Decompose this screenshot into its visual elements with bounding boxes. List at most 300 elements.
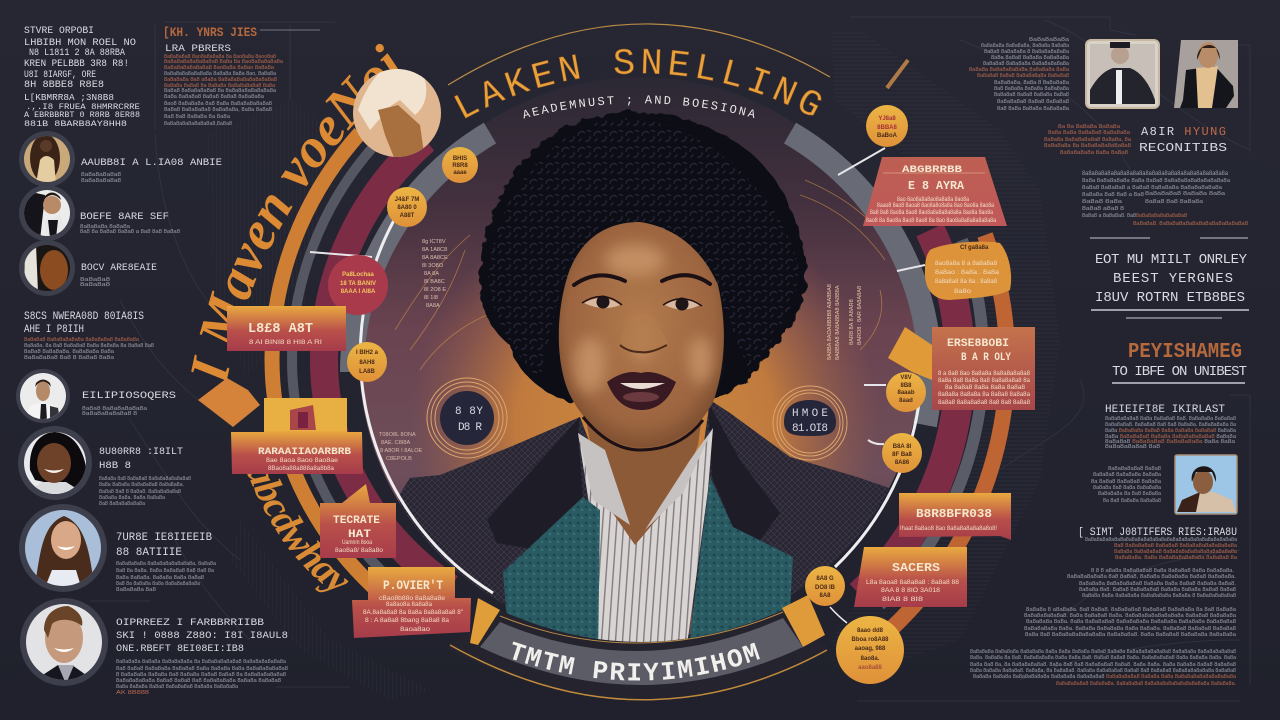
subtitle: AEADEMNUST ; AND BOESIONA — [524, 95, 754, 118]
right orange heading: PEYISHAMEG — [1128, 341, 1242, 364]
right lower text: 8a8a8a8a 8a8a8a8a8a8 8a8a8a 8a8a 8a8a8 8a8a8a 8a8a8. — [1079, 581, 1236, 587]
profile 2 — [19, 185, 180, 241]
box: trapezoid: ABGBRRBB — [902, 165, 962, 176]
ring: right orange arc — [890, 235, 1007, 630]
callout: gold circle 3: LA8B — [359, 369, 375, 375]
profile 1 — [19, 130, 222, 187]
right lower text — [970, 527, 1238, 687]
profile 1: AAUBB8I A L.IA08 ANBIE — [81, 158, 222, 169]
profile 2: 8a8 8a 8a8a8 8a8a8 a 8a8 8a8 8a8a8 — [80, 229, 180, 235]
box: trapezoid: E 8 AYRA — [908, 179, 965, 193]
vertical notes inside disc right: 8A8B8A8 8A8A8BA8 8A8B8A — [835, 285, 841, 360]
right section with photo: 8a8a 8a8a8a8a 8a8a8 8a8a 8a8a8a 8a8a8a8 8a8a8a — [1105, 428, 1237, 434]
right lower text: 8a8a8a 8a8a8a8a8 8a8a8a8a8a8a8a8a8a8a8a8a — [1114, 549, 1238, 555]
right heading: A8IR HYUNG — [1141, 125, 1226, 139]
callout: gold circle 2: A88T — [400, 213, 415, 219]
right paragraph: 8a8a8 a 8a8a8a8. 8a88a8a8a8a8a8a8a8a8 — [1082, 213, 1187, 219]
vertical notes inside disc right: 8ARO8 : 8AR 8A8A8A8 — [857, 286, 863, 345]
box: salmon detail: 8a 8a8a8 8a8a 8a8a 8a8a8 — [945, 385, 1026, 391]
title: LAKEN SNELLING — [454, 48, 822, 118]
short notes inside disc left upper: 8A8A — [426, 303, 440, 309]
vertical notes inside disc right — [827, 284, 863, 360]
left column: top article: 8a8a8a8a8a8a8a8a 8a8a8a 8a8a 8ao, 8a8a8a — [164, 71, 277, 77]
badge: left concentric rings: D8 R — [458, 422, 482, 434]
profile 5 — [18, 426, 191, 507]
left column: intro text: 8H 8BBE8 R8E8 — [24, 80, 104, 91]
section text: 8a8a8 8a8a8a8a. 8a8a8a8a 8a8a — [24, 349, 115, 355]
right paragraph: 8a8a8 8a8a8a8 a 8a8a8 8a8a8a8a 8a8a8a8a8a8a — [1082, 185, 1223, 191]
profile 7 — [20, 598, 288, 696]
callout: gold circle bottom right: DO8 IB — [815, 585, 836, 591]
callout: crimson circle: 8AAA I AI8A — [341, 289, 376, 295]
script lettering lower left: abcdwhay — [247, 474, 348, 592]
box: sacers: 8AA 8 8 8IO 3A018 — [881, 588, 941, 594]
short notes inside disc left upper: 8I 1I8 — [424, 295, 438, 301]
right lower text: 8a8 8a8a8a8a8 8a8a8a8 8a8a8a8a8a8a8a8a8a — [1114, 543, 1238, 549]
callout: gold circle 2: 8A80 0 — [397, 205, 417, 211]
teal scarf — [503, 477, 793, 660]
callout: crimson circle — [328, 255, 388, 315]
callout: gold circle 1 — [442, 147, 478, 183]
box: sacers: L8a 8aoa8 8a8a8a8 : 8a8a8 88 — [866, 580, 960, 586]
box: orange blob: 8a8a8a8 8a 8a : 8a8a8 — [935, 279, 998, 285]
box: tecrate hat — [320, 484, 396, 558]
right section with photo: 8a8a8a8a 8a 8a8 8a8a8a — [1098, 491, 1162, 497]
left column: top article: 8a8a8a 8a8a8 8a 8a8a8a 8a8a8a8a8a8 8a8a — [164, 83, 276, 89]
profile 4: 8a8a8a8a8a8a8 8 — [82, 411, 137, 417]
box: trapezoid — [863, 157, 1007, 226]
right paragraph: 8a8a8a8. 8a8a8a8a8a8a8a8a8a8a8a8a8a8 — [1133, 221, 1248, 227]
callout: large gold circle: aaoag, 988 — [855, 646, 886, 652]
box: salmon detail: ERSE8BOBI — [947, 338, 1009, 350]
callout: gold circle 2 — [387, 187, 427, 227]
profile 6: 7UR8E IE8IIEEIB — [116, 532, 212, 544]
accent dash — [887, 60, 908, 88]
box: orange blob: 8a8ao : 8a8a . 8a8a — [935, 270, 1000, 276]
connectors — [310, 148, 925, 444]
callout: gold circle 1: BHIS — [453, 156, 467, 162]
short notes inside disc left upper: 8I BA8C — [424, 279, 445, 285]
right top text: 8a8a8a8a8 8a8a8 8a8a8a8 — [997, 99, 1069, 105]
left column: intro text: N8 L1811 2 8A 88RBA — [29, 48, 125, 59]
right heading: RECONITIBS — [1139, 141, 1227, 155]
profile 3: 8a8a8a8 — [80, 277, 110, 283]
right lower text: 8a8a8a8a8a8a8. 8a8a 8a8a8a8 8a8a. 8a8a8a8a8a8a8a8a8a 8a8a8a8 8a8a8a8a — [1024, 613, 1237, 619]
notes inside disc left lower: 8AE. C8I8A — [381, 440, 410, 446]
profile 6: 8a8a8a8a 8a8 — [116, 587, 156, 593]
profile 3 — [19, 240, 157, 296]
profile 6: 88 8ATIIIE — [116, 547, 182, 559]
ring: left grey arc — [292, 147, 400, 588]
callout: gold circle bottom right: 8A8 — [819, 593, 831, 599]
callout: gold circle bottom right: 8A8 G — [816, 576, 834, 582]
box: trapezoid: 8a8 8a8 8ao8a 8ao8 8ao8a8a8a8a8a8a 8ao8a 8ao8a — [870, 210, 994, 216]
gold diamond right — [888, 327, 932, 380]
right top text: 8a8a8a8 8a8a8 8a8a8a8a8a 8a8a8a8 — [977, 73, 1069, 79]
left column: intro text: L[KBMRR8A ;3N8B8 — [24, 93, 114, 103]
box: trapezoid: 8aao8 8ao8 8aoa8 8ao8a8o8a8a 8ao 8ao8a 8ao8a — [877, 203, 995, 209]
right top text: 8a8a8a8a 8a8a8a8a, 8a8a8a 8a8a8a — [981, 43, 1070, 49]
profile 7: 8a8 8a8a8 8a8a8a8a 8a8a8a8 8a8a 8a8a8a 8a8a 8a8a8a8a8a8a8 — [116, 666, 288, 672]
left column: top article: 8a8 8a8 8a8a8a 8a 8a8a — [164, 114, 231, 120]
right orange note: 8a8a8a8a 8a 8a8a8a8a8a8a8a8 — [1044, 143, 1131, 149]
box: salmon detail: B A R OLY — [961, 352, 1011, 364]
box: right ribbon: B8R8BFR038 — [916, 507, 992, 521]
banner text: TMTM PRIYIMIHOM — [512, 642, 760, 680]
left column: intro text: STVRE ORPOBI — [24, 26, 94, 37]
box: ribbon with icon: 8Bao8a88a888a8a8b8a — [268, 466, 335, 472]
right paragraph: 8a8a8a8a8 8a8a8a 8a8a — [1145, 191, 1226, 197]
script lettering upper left: I Maven voeNoi — [191, 44, 398, 380]
box: tecrate hat: 8ao8a8/ 8a8a8o — [335, 548, 384, 554]
hair — [480, 111, 806, 402]
box: sacers: SACERS — [892, 561, 940, 575]
right heading — [1139, 125, 1227, 155]
right paragraph: 8a8a8a8a8a8a8a8a8a8a8a8a8a8a8a8a8a8a8a8a8a8a8a — [1082, 170, 1228, 177]
profile 2: 8a8a8a8a 8a8a8a — [80, 224, 131, 230]
short notes inside disc left upper: 8A 1A8C8 — [422, 247, 447, 253]
right subheading: TO IBFE ON UNIBEST — [1112, 364, 1247, 380]
box: tecrate hat: HAT — [348, 529, 371, 541]
left column: top article: 8a8a8a8a 8a8 a8a8a 8a8a8a8a8a8a8a8a8a8 — [164, 77, 277, 83]
callout: gold circle right top: 8BBA8 — [877, 125, 897, 131]
right section with photo: 8a 8a8a8 8a8a8a8 8a8a8a — [1091, 479, 1162, 485]
rules — [1090, 238, 1249, 383]
profile 5: 8a8a8a 8a8 8a8a8a8 8a8a8a8a8a8a8a8 — [99, 476, 191, 482]
right orange note: 8a 8a 8a8a8a 8a8a8a — [1058, 124, 1121, 130]
right paragraph: 8a8a8 a8a8 8 — [1082, 206, 1124, 212]
right lower text: 8 8 8 a8a8a 8a8a8a8a8 8a8a 8a8a8a8 8a8a 8a8a8a8a. — [1091, 568, 1234, 574]
right section with photo: 8a 8a8 8a8a8a 8a8a8a8 — [1103, 498, 1161, 504]
badge: left concentric rings — [427, 378, 507, 458]
right top text: 8a8a8 8a8a8a8a 8 8a8a8a8a8a8a — [984, 49, 1070, 55]
right lower text: 8a8a8a 8 a8a8a8a. 8a8 8a8a8. 8a8a8a8a8 8a8a8a8 8a8a8a8a 8a 8a8 8a8a8a — [1026, 607, 1237, 613]
central disc — [359, 77, 921, 639]
right paragraph — [1082, 170, 1248, 227]
left column: intro text: A EBRBBRBT 0 R8RB 8ER88 — [24, 111, 140, 120]
orange diamond left — [198, 378, 260, 427]
right lower text: [ SIMT J08TIFERS RIES:IRA8U — [1078, 527, 1237, 539]
callout: gold circle right 2 — [886, 372, 926, 412]
badge: right concentric rings: H M O E — [792, 408, 828, 420]
box: sacers — [854, 547, 967, 607]
box: tecrate hat: TECRATE — [333, 515, 380, 527]
callout: gold circle right 2: 8B8 — [900, 383, 912, 389]
right section with photo: HEIEIFI8E IKIRLAST — [1105, 404, 1225, 416]
short notes inside disc left upper: 8A 8A — [424, 271, 439, 277]
profile 2: BOEFE 8ARE SEF — [80, 212, 169, 223]
left column: intro text — [24, 26, 140, 129]
right top text: 8a8a8a8 8a8a8 8a8a8a 8a8a8 — [994, 92, 1069, 98]
box: orange blob: 8ao8a8a 8 a 8a8a8a8 — [935, 261, 998, 267]
shirt collar — [578, 428, 713, 530]
profile 5: 8a8a8 8a8 8 8a8a8. 8a8a8a8a8a8 — [99, 489, 181, 495]
section text — [24, 311, 154, 361]
box: povier: 8a8ao8a 8a8a8a — [386, 602, 433, 608]
concentric rings — [272, 133, 1007, 630]
right large statement: EOT MU MIILT ONRLEY — [1095, 252, 1248, 268]
right paragraph: 8a8a8 8a8 8a8a8a — [1145, 199, 1204, 205]
profile 3: 8a8a8a8 — [80, 282, 110, 288]
badge: right concentric rings: 81.OI8 — [792, 423, 828, 435]
callout: large gold circle: aao8a88 — [858, 665, 883, 671]
grey arc segments — [352, 133, 930, 425]
right paragraph: 8a8a8 8a8a — [1082, 199, 1123, 205]
badge: right concentric rings — [773, 386, 847, 460]
profile 3: BOCV ARE8EAIE — [81, 263, 157, 274]
box: povier: 8 : A 8a8a8 8bang 8a8a8 8a — [365, 618, 450, 624]
right section with photo: 8a8a8a8a8a8 8a8a 8a8a8a8 8a8. 8a8a8a8a 8a8a8a8 — [1105, 416, 1236, 422]
left column: intro text: U8I 8IARGF, ORE — [24, 70, 96, 81]
right top text: 8a8a8a8a8a — [1029, 37, 1070, 43]
right paragraph: 8a8a8a 8a8 8a8 a 8a8 — [1082, 192, 1144, 198]
right section with photo: 8a8a8a8a8a8 8a8 — [1105, 444, 1160, 450]
box: right ribbon — [899, 493, 1011, 540]
profile 4 — [16, 369, 176, 423]
box: salmon detail: 8a8a8a 8a8a8a 8a 8a8a8 8a8a8a — [938, 392, 1031, 398]
right section with photo: 8a8a8a8a8a8 8a8a8 — [1108, 466, 1161, 472]
profile 7: SKI ! 0888 Z88O: I8I I8AUL8 — [116, 631, 288, 642]
short notes inside disc left upper: 8g ICT8V — [422, 239, 446, 245]
thin gold arc top — [448, 24, 830, 85]
profile 5: 8U80RR8 :I8ILT — [99, 447, 183, 458]
box: povier: P.OVIER'T — [383, 578, 443, 593]
right top text: 8a8a8a8 8a8a8a8a 8a8a8a8a8a8a — [983, 61, 1070, 67]
callout: gold circle 3 — [347, 342, 387, 382]
left column: top article: 8a8a8 8a8a8a8a8 8a8a8a8a, 8a8a 8a8a8 — [164, 107, 272, 113]
right lower text: 8a8a8a8a8a8 8a8a8a8a. 8a8a8a8a8 8a8a8a8a8a8a8a8a8a8a8a 8a8a8a8a. — [1056, 681, 1236, 687]
right top text: 8a8a8a8a, 8a8a 8 8a8a8a8a — [994, 80, 1070, 86]
vertical notes inside disc right: 8AR8 8A 8 A8AR8 — [849, 299, 855, 345]
callout: gold circle right 3: B8A 8I — [893, 444, 912, 450]
right lower text: 8a8a8a8a8a8a8a8a8a8a8a8a8a8a8a8a8a8a8a8a8a8a8a8a8a8a — [1085, 537, 1238, 543]
left column: intro text: LHBIBH MON ROEL NO — [24, 38, 136, 49]
box: salmon detail: 8 a 8a8 8ao 8a8a8a 8a8a8a8a8a8 — [938, 371, 1031, 377]
notes inside disc left lower: 8 A8OR I 8ALOE — [380, 448, 423, 454]
right section with photo: 8a8a8a8 8a8a8a8a8 8a8a8a8a8a 8a8a 8a8a — [1105, 439, 1236, 445]
left column: intro text: KREN PELBBB 3R8 R8! — [24, 59, 129, 70]
profile 5: 8a8 8a8a8a8a8a8a — [99, 501, 146, 507]
right section with photo: 8a8a8a8a8. 8a8a8a8 8a8 8a8 8a8a8a. 8a8a8a8a8a 8a — [1105, 422, 1237, 428]
callout: crimson circle: Pa8Lochaa — [342, 272, 375, 278]
box: trapezoid: 8ao8 8a 8ao8a 8ao8 8ao8 8a 8ao 8ao8a8a8a8a8a8a8a — [866, 218, 997, 224]
box: orange blob: 8a8o — [954, 289, 972, 295]
right large statement — [1095, 252, 1248, 306]
jacket — [398, 402, 889, 620]
right lower text: 8a8a8a 8a8a8a 8a8a8a8a8a8a 8a8a8a8a 8a8a8a8a8 8a8a8a8a8a8 8a8a8a 8a8a 8a8a8a8a8a8a8a8a8a8a — [973, 674, 1237, 680]
ring: right grey arc — [880, 240, 983, 605]
profile 6: 8a8 8a 8a8a. 8a8a 8a8a8a8 8a8 8a8 8a — [116, 568, 215, 574]
callout: gold circle right 3: 8A86 — [895, 460, 910, 466]
box: ribbon with icon — [231, 398, 363, 474]
right lower text: 8a8a 8a8a8a 8a8a8a8. 8a8a8a, 8a 8a8a8a8. 8a8a8a 8a8a8a8a8 8a8a8 8a8 8a8a8a8 8a8a8a8a8a8a8a 8a8a8a8 — [970, 668, 1236, 674]
callout: gold circle right 3 — [882, 433, 922, 473]
profile 7: 8a8a8a8a8a8a 8a8a8 8a8a8 8a8 8a8a8a8a8a 8a8a8a 8a8a8a8 — [116, 678, 281, 684]
section text: S8CS NWERA08D 80IA8IS — [24, 311, 144, 323]
section text: 8a8a8a8a8 8a8 8 8a8a8 8a8a — [24, 355, 115, 361]
box: lake art: L8£8 A8T — [248, 321, 313, 337]
lips — [607, 372, 676, 410]
left column: top article: 8a8a8a8a8a8a8a8a8 8a8a 8a 8ao8a8a8a8a8a — [164, 59, 284, 65]
white ring — [360, 197, 920, 623]
left column: top article: LRA PBRERS — [165, 44, 231, 55]
right top text: 8a8 8a8a 8a8a8a 8a8a8a8a — [997, 106, 1070, 112]
right orange note: 8a8a 8a8a 8a8a8a8 8a8a8a8a — [1048, 130, 1131, 136]
eyebrows — [574, 275, 710, 285]
left column: intro text: 881B 8BARB8AY8HH8 — [24, 120, 127, 129]
vertical notes inside disc right: 8A8BA 8AOA8B8B8 A8A8BA8 — [827, 284, 833, 360]
bottom banner — [450, 595, 828, 700]
right large statement: BEEST YERGNES — [1113, 271, 1233, 287]
ring: left crimson arc — [324, 140, 450, 588]
profile 4: 8a8a8 8a8a8a8a8a8a — [82, 406, 148, 412]
callout: gold circle right top: YJ8a8 — [878, 116, 896, 122]
profile 6 — [19, 504, 217, 595]
right section with photo: 8a8a 8a8a8a8a8 8a8a8a 8a8a8a8a8a8a8 8a8a8a — [1105, 434, 1237, 440]
shirt — [578, 428, 713, 645]
right lower text: 8a8a 8a8 8a, 8a 8a8a8a8a8a8. 8a8a 8a8 8a8 8a8a8a8a8 8a8a8. 8a8a 8a8a. 8a8a 8a8a8a 8a8a8 8a8a8a8 — [970, 662, 1236, 668]
box: ribbon with icon: RARAAIIAOARBRB — [258, 447, 351, 458]
profile 5: H8B 8 — [99, 461, 131, 472]
right section with photo: 8a8a8a8 8a8a8a8a 8a8a8a — [1093, 472, 1162, 478]
callout: gold circle right 3: 8F Ba8 — [892, 452, 912, 458]
box: povier: 8A.8a8a8a8 8a 8a8a 8a8a8a8a8 8" — [363, 610, 463, 616]
left column: top article: [KH. YNRS JIES — [163, 25, 257, 40]
profile 4: EILIPIOSOQERS — [82, 391, 176, 402]
callout: crimson circle: 18 TA BANIV — [340, 281, 376, 287]
right lower text: 8a8a. 8a8a8a 8a 8a8. 8a8a8a8a8a 8a8a 8a8a 8a8. 8a8a8 8a8a8 8a8a. 8a8a8a8a8a8 8a8a 8a8a8a 8a8a. 8a8a — [970, 655, 1237, 661]
box: ribbon with icon: 8ae 8aoa 8aoo 8ao8ae — [266, 458, 339, 464]
face — [559, 222, 724, 447]
left column: top article: 8a8a8 8a8a8a8a8a8 8a 8a8a8a8a8a8a8a8a — [164, 88, 277, 94]
right lower text: 8a8a8a 8a8. 8a8a8 8a8a8a8a8 8a8a8a 8a8a8a 8a8a8 8a8a8 — [1079, 587, 1236, 593]
box: orange blob: Cf ga8a8a — [960, 245, 989, 251]
section text: AHE I P8IIH — [24, 324, 84, 336]
badge: left concentric rings: 8 8Y — [455, 406, 483, 418]
left column: top article: 8a8a 8a8a8a8 8a8a8 8a8a8 8a8a8a8a — [164, 94, 265, 100]
callout: gold circle 1: aaae — [453, 170, 467, 176]
profile 5: 8a8a 8a8a8a 8a8a8a8a8 8a8a8a8a. — [99, 482, 184, 488]
short notes inside disc left upper: 8A 8A8CE — [422, 255, 448, 261]
box: salmon detail: 8a8a8 8a8a8a8a8 8a8 8a8 8a8a8 — [938, 400, 1031, 406]
right top text: 8a8a8a 8a8a8a8a8a8a 8a8a8a8a 8a8a — [969, 67, 1070, 73]
profile 7: 8 8a8a8a8a 8a8a8a 8a8 8a8a8a 8a8a8 8a8a8 8a 8a8a8a8a8a8a8 — [116, 672, 286, 678]
callout: large gold circle: 8aao dd8 — [857, 628, 884, 634]
profile 7: OIPRREEZ I FARBBRRIIBB — [116, 618, 264, 629]
eyes — [582, 296, 702, 310]
callout: large gold circle: 8ao8a. — [861, 656, 880, 662]
left column: top article: 8a8a8a8a8a8a8a8 8ao8a8a 8a8ao 8a8a8a — [164, 65, 275, 71]
profile 6: 8a8a8a8a8a 8a8a8a8a8a8a8a8a, 8a8a8a — [116, 561, 217, 567]
short notes inside disc left upper: 8I 3O8O — [422, 263, 444, 269]
profile 7: 8a8a 8a8a8a 8a8a8 8a8a8a8a8 8a8a8a 8a8a8a8a — [116, 684, 239, 690]
right orange note: 8a8a8a 8a8a8a8a8a8 8a8a8a, 8a — [1044, 137, 1132, 143]
right top text: 8a8a 8a8a8 8a8a8a 8a8a8a8a — [991, 55, 1070, 61]
profile 7: ONE.RBEFT 8EI08EI:IB8 — [116, 644, 244, 655]
box: salmon detail — [932, 327, 1035, 410]
left column: top article — [163, 25, 320, 127]
callout: gold circle right 2: 8aaab — [897, 390, 915, 396]
photo: graduate — [1086, 40, 1159, 108]
callout: large gold circle — [836, 616, 904, 684]
box: salmon detail: 8a8a 8a8 8a8a 8a8 8a8a8a8a8 8a — [938, 378, 1031, 384]
profile 7: AK 8B888 — [116, 690, 149, 696]
callout: gold circle bottom right — [805, 566, 845, 606]
left column: top article: 8a8a8a8a8 8ao8a8a8a8a 8a 8ao8a8a 8aoo8a8 — [164, 54, 276, 60]
box: povier — [352, 567, 471, 638]
box: right ribbon: Ihaat 8a8ao8 8ao 8a8a8a8a8a8a8o8! — [900, 526, 997, 532]
section text: 8a8a8a. 8a 8a8 8a8a8a8 8a8a 8a8a8a 8a 8a8a8 8a8 — [24, 343, 154, 349]
right section with photo: 8a8a8a 8a8 8a8a 8a8a8a8a — [1093, 485, 1162, 491]
right top text: 8a8 8a8a8a 8a8a8a 8a8a8a8a — [994, 86, 1070, 92]
callout: large gold circle: Bboa ro8A88 — [851, 637, 889, 643]
short notes inside disc left upper: 8I 2O8 E — [424, 287, 446, 293]
short notes inside disc left upper — [422, 239, 448, 309]
box: orange blob — [925, 242, 1011, 300]
ring: right crimson arc — [860, 230, 960, 595]
nose — [620, 318, 668, 354]
right section with photo — [1091, 404, 1237, 514]
box: sacers: 8IA8 8 8I8 — [882, 597, 924, 603]
callout: gold circle right top: BaBoA — [877, 133, 898, 139]
right orange note — [1044, 124, 1132, 156]
callout: gold circle right 2: V8V — [900, 375, 912, 381]
callout: gold circle 3: 8AH8 — [359, 360, 375, 366]
icon: ribbon crest — [290, 405, 316, 430]
right lower text: 8a8a8a8a 8a8a. 8a8a 8a8a8a8a8 8a8a8a8a8a 8a8a8a8a 8a8a8a8a 8a8a8a8a8 — [1026, 619, 1236, 625]
peach portrait circle — [353, 69, 441, 157]
callout: gold circle right top — [866, 105, 908, 147]
ring: left orange arc — [272, 133, 380, 593]
callout: gold circle 3: I BIH2 a — [356, 350, 379, 356]
profile 7: 8a8a8a8a 8a8a8a 8a8a8a8a8a 8a 8a8a8a8a8a8a8 8a8a8a8a8a8a8a — [116, 659, 287, 665]
left column: top article: 8a8a8a8a8a8a8a8a8,8a8a8 — [164, 121, 232, 127]
right orange note: 8a8a8a8a8a 8a8a 8a8a8 — [1060, 150, 1128, 156]
neck — [585, 415, 702, 545]
notes inside disc left lower: C8EPOLB — [386, 456, 412, 462]
right paragraph: 8a8a 8a8a8a8a8a 8a8a 8a8a8 8a8a8a8a8a8a8a8a8a8a — [1082, 178, 1231, 184]
right lower text: 8a8a8a8a8a 8a8a. 8a8a8a 8a8a8a8a 8a8a 8a8a8a. 8a8a8a8 8a8a8a8 8a8a8a8 — [1024, 626, 1236, 632]
right lower text: 8a8a8a8a8a8a 8a8 8a8a8, 8a8a8a 8a8a8a8a 8a8a8 8a8a8a8a. — [1067, 574, 1236, 580]
callout: gold circle 1: R8R8 — [452, 163, 468, 169]
profile 1: 8a8a8a8a8a8 — [81, 172, 121, 178]
box: lake art — [227, 306, 346, 351]
box: povier: cBao8b88o 8a8a8a8e — [379, 596, 446, 602]
left column: top article: 8ao8 8a8a8a8a 8a8 8a8a 8a8a8a8a8a8a8 — [164, 101, 272, 107]
jaw shadow — [583, 417, 703, 450]
right top text — [969, 37, 1070, 112]
right lower text: 8a8a 8a8 8a8a8a8a8a8a8a8a 8a8a8a8a8. 8a8a 8a8a8a8 8a8a8a8a 8a8a8a8a — [1025, 632, 1237, 638]
profile 1: 8a8a8a8a8a8 — [81, 178, 121, 184]
box: povier: 8aoa8ao — [400, 627, 431, 633]
box: trapezoid: 8ao 8ao8a8a8ao8a8a8a 8ao8a — [897, 197, 970, 203]
callout: gold circle 2: J4&F 7M — [395, 197, 419, 203]
left column: intro text: .,.I8 FRUEA 8HMRRCRRE — [26, 103, 140, 112]
photo: woman — [1174, 40, 1238, 108]
right lower text: 8a8a8a8a 8a8a8a8a 8a8a8a8a 8a8a 8a8a 8a8a8a 8a8a8 8a8a8a 8a8a8a8a8a8a8a8 8a8a8a8a 8a8a8a8a8a8a8 — [970, 649, 1236, 655]
section text: 8a8a8a8 8a8a8a8a8a8a 8a8a8a8a8 8a8a8a8a — [24, 337, 140, 343]
callout: gold circle right 2: 8aad — [899, 398, 913, 404]
box: lake art: 8 AI BINI8 8 HI8 A RI — [249, 340, 322, 346]
right large statement: I8UV ROTRN ETB8BES — [1095, 290, 1245, 306]
right lower text: 8a8a8a8a. 8a8a 8a8a8a8a8a8a8a 8a8a8a8 8a — [1115, 555, 1238, 561]
profile 6: 8a8a 8a8a8a. 8a8a8a 8a8a 8a8a8 — [116, 575, 204, 581]
portrait — [398, 111, 895, 660]
right lower text: 8a8a8a 8a8a 8a8a8a8a 8a8a8a8a8a 8a8a8a 8 8a8a8a8a8a8a8 — [1082, 593, 1236, 599]
profile 5: 8a8a8a 8a8a. 8a8a 8a8a8a — [99, 495, 166, 501]
cheek highlights — [574, 244, 712, 393]
notes inside disc left lower — [379, 432, 423, 462]
